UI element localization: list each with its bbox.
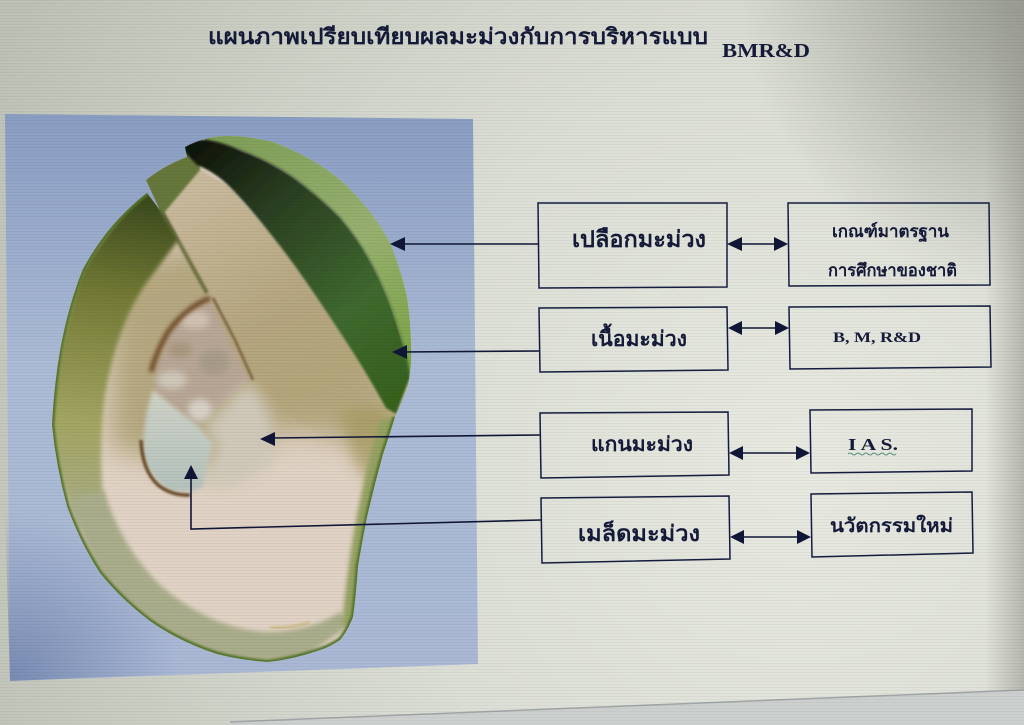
- seed upper mottled: [153, 300, 248, 426]
- box: national education standards: [788, 203, 990, 286]
- box: mango flesh: เนื้อมะม่วง: [591, 323, 687, 351]
- box: IAS: I A S.: [848, 435, 898, 454]
- mango flesh base: [40, 130, 420, 670]
- lower green-grey rim: [70, 490, 350, 660]
- right olive flesh near skin: [340, 405, 400, 490]
- arrow: skin label to mango skin: [390, 237, 538, 251]
- tan flesh upper: [110, 210, 400, 470]
- small green chunk at top: [140, 150, 200, 214]
- box: mango flesh: [539, 307, 728, 372]
- left olive crescent: [50, 185, 180, 530]
- yellow tip mark: [270, 622, 310, 628]
- seed lower: [143, 390, 213, 491]
- box: national education standards: เกณฑ์มาตรฐาน: [832, 221, 949, 243]
- right rim: [342, 417, 395, 625]
- dark green inner skin: [180, 140, 410, 414]
- box: IAS: [810, 409, 972, 473]
- arrow: seed label to mango seed: [184, 465, 541, 529]
- seed mottling: [157, 311, 230, 421]
- box: mango core: [540, 412, 729, 478]
- box: mango seed: [541, 496, 730, 563]
- photo blue background: [5, 114, 478, 681]
- seed cavity brown edge: [151, 298, 210, 372]
- box: mango core: แกนมะม่วง: [591, 434, 693, 456]
- photo: mango cross-section: [5, 114, 478, 681]
- cut wedge: [164, 168, 286, 296]
- box: mango skin: [538, 203, 727, 288]
- title: [208, 24, 810, 62]
- box: mango seed: เมล็ดมะม่วง: [578, 519, 700, 546]
- box: B, M, R&D: B, M, R&D: [833, 330, 921, 346]
- seed right dark edge: [213, 298, 253, 380]
- arrow: flesh label to mango flesh: [392, 345, 539, 359]
- box: B, M, R&D: [789, 306, 991, 369]
- double arrow: seed to innovation: [730, 530, 811, 544]
- box: mango skin: เปลือกมะม่วง: [572, 227, 706, 252]
- double arrow: core to IAS: [729, 446, 810, 460]
- wedge left edge shadow: [160, 208, 207, 293]
- title: แผนภาพเปรียบเทียบผลมะม่วงกับการบริหารแบบ: [208, 24, 708, 49]
- outer green rim: [52, 193, 395, 662]
- seed fibres blending into flesh: [203, 382, 274, 488]
- double arrow: skin to national education standards: [727, 237, 788, 251]
- light green skin band: [205, 134, 413, 380]
- box: new innovation: นวัตกรรมใหม่: [830, 514, 953, 537]
- box: new innovation: [811, 492, 973, 557]
- arrow: core label to mango core: [260, 432, 540, 446]
- title: BMR&D: [722, 40, 810, 62]
- box: national education standards: การศึกษาของชาติ: [828, 261, 957, 280]
- seed lower brown edge: [141, 440, 190, 495]
- mango body clipped to outline: [40, 130, 420, 670]
- double arrow: flesh to B, M, R&D: [728, 321, 789, 335]
